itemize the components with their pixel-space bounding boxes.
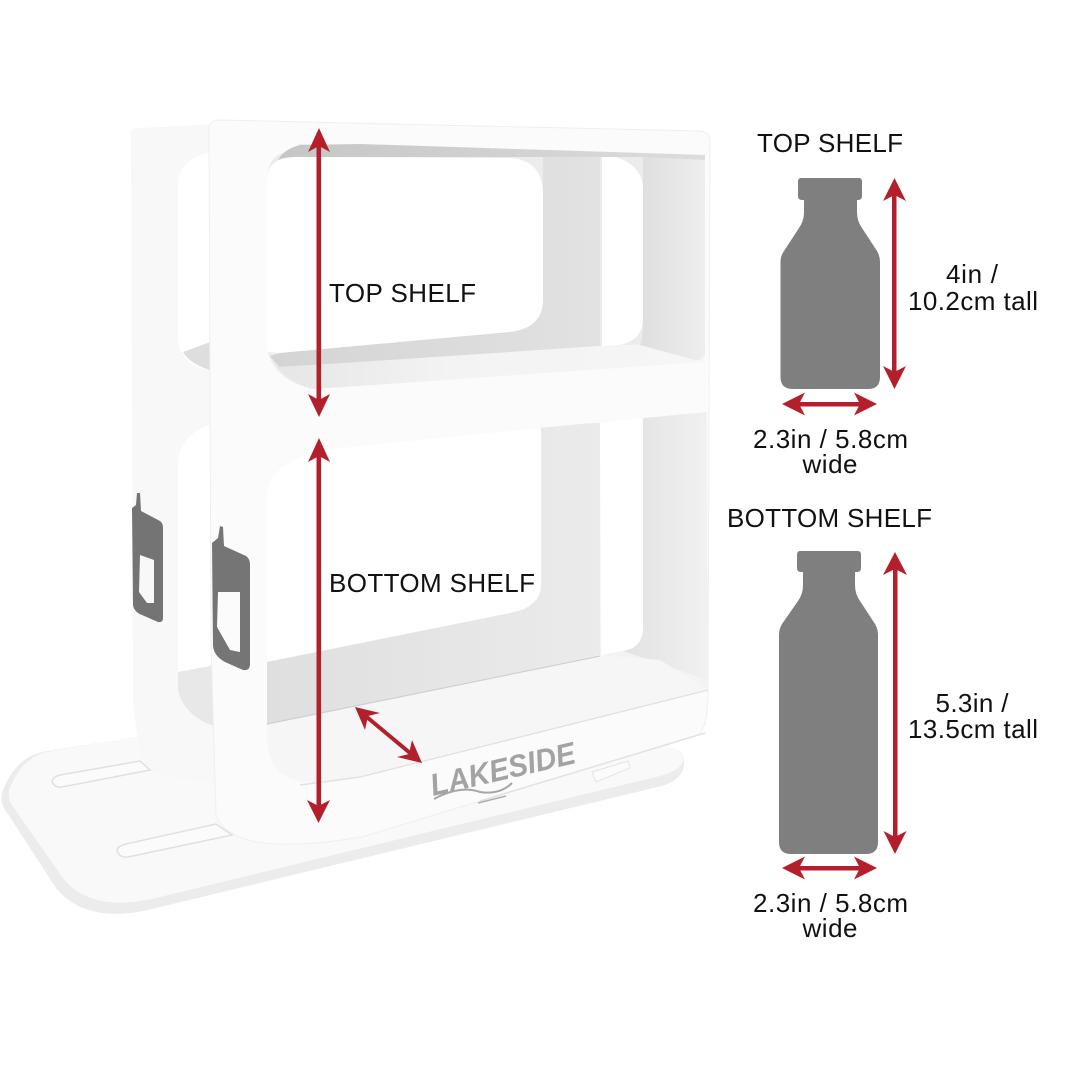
product photo: rotating two-tier shelf rack xyxy=(1,120,710,914)
label: bottom shelf on rack: BOTTOM SHELF xyxy=(329,568,535,598)
text: bottom bottle width: 2.3in / 5.8cm xyxy=(753,888,908,918)
top lip of middle rail xyxy=(267,352,708,490)
icon: bottom shelf bottle silhouette xyxy=(779,551,878,854)
top shelf compartment xyxy=(267,144,705,389)
text: top bottle width xyxy=(753,424,908,479)
arrow: bottom bottle width xyxy=(782,856,877,880)
text: bottom bottle width: wide xyxy=(802,913,858,943)
arrow: top bottle width xyxy=(782,392,877,416)
front latch clip xyxy=(212,526,250,670)
text: bottom bottle height: 13.5cm tall xyxy=(908,714,1038,744)
see-through window xyxy=(267,428,541,662)
heading: bottom shelf: BOTTOM SHELF xyxy=(727,503,932,533)
see-through window xyxy=(267,157,543,353)
text: top bottle height xyxy=(908,259,1038,316)
arrow: shelf depth xyxy=(355,707,422,763)
heading: top shelf: TOP SHELF xyxy=(757,128,903,158)
text: bottom bottle height: 5.3in / xyxy=(936,688,1009,718)
bottom shelf compartment xyxy=(267,412,708,803)
label: top shelf on rack: TOP SHELF xyxy=(329,278,476,308)
icon: top shelf bottle silhouette xyxy=(780,178,880,389)
text: bottom bottle height xyxy=(908,688,1038,744)
text: top bottle height: 10.2cm tall xyxy=(908,286,1038,316)
rear latch clip xyxy=(132,493,163,622)
text: top bottle width: wide xyxy=(802,449,858,479)
arrow: top bottle height xyxy=(883,178,906,389)
text: bottom bottle width xyxy=(753,888,908,943)
arrow: bottom bottle height xyxy=(883,552,907,854)
text: top bottle width: 2.3in / 5.8cm xyxy=(753,424,908,454)
rear shelf frame xyxy=(131,124,216,782)
brand logo: LAKESIDE xyxy=(427,735,580,803)
arrow: bottom shelf height xyxy=(307,438,330,823)
arrow: top shelf height xyxy=(308,128,330,417)
front shelf frame xyxy=(209,120,710,844)
text: top bottle height: 4in / xyxy=(946,259,999,289)
base plate xyxy=(1,737,684,914)
tab under shelf xyxy=(592,761,630,782)
